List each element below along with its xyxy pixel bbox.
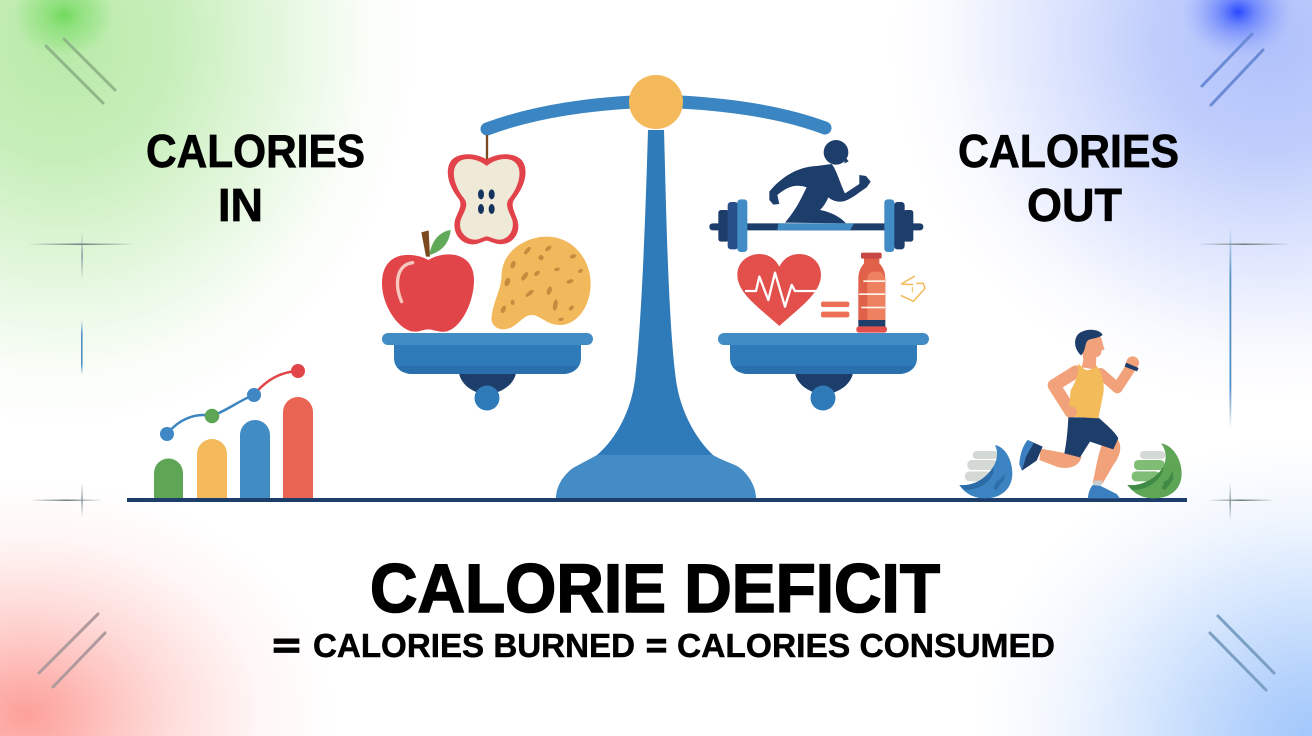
- icon: barbell: [709, 199, 923, 252]
- front leg: [1093, 438, 1120, 483]
- formula subtitle: [273, 627, 1055, 664]
- formula subtitle: =: [273, 627, 300, 664]
- front arm: [1101, 369, 1130, 388]
- icon: equals sign: [821, 302, 849, 317]
- icon: running silhouette: [769, 140, 871, 223]
- back arm: [1054, 372, 1076, 412]
- icon: cookie: [492, 237, 591, 329]
- exercise items on right pan: [709, 140, 925, 333]
- bars: [154, 397, 313, 498]
- sock: [1093, 481, 1103, 487]
- wristband: [1125, 363, 1139, 371]
- trend points: [160, 364, 305, 441]
- bar and line chart: [154, 364, 313, 498]
- icon: drink bottle: [856, 253, 887, 333]
- front shoe: [1088, 485, 1120, 498]
- heading: calories out: [958, 125, 1179, 231]
- neck and head: [1082, 348, 1098, 370]
- icon: heart with pulse: [737, 254, 821, 326]
- heading: calories out: OUT: [1027, 179, 1122, 231]
- back leg: [1039, 449, 1082, 468]
- tank top: [1068, 363, 1104, 418]
- heading: calories in: IN: [218, 179, 263, 231]
- icon: apple slice: [448, 135, 526, 244]
- scale stand: [556, 130, 756, 498]
- hand on hip: [1066, 406, 1077, 417]
- jogging figure with bowls: [959, 330, 1182, 498]
- hand: [1126, 356, 1139, 369]
- left pan: [382, 333, 593, 410]
- sparkle crosses: [28, 228, 1290, 521]
- hair: [1075, 330, 1103, 355]
- balance scale: [382, 75, 929, 498]
- ground line: [127, 498, 1187, 502]
- icon: blue bowl: [959, 445, 1012, 498]
- formula subtitle: =: [646, 627, 667, 664]
- heading: calories out: CALORIES: [958, 125, 1179, 177]
- main title: CALORIE DEFICIT: [370, 550, 940, 627]
- icon: runner: [1019, 330, 1139, 498]
- back shoe: [1019, 440, 1043, 471]
- icon: small sparkle doodle: [901, 276, 925, 301]
- icon: green bowl: [1127, 443, 1182, 498]
- formula subtitle: CALORIES BURNED: [313, 627, 635, 664]
- shorts: [1064, 417, 1118, 457]
- scale pivot: [629, 75, 683, 129]
- formula subtitle: CALORIES CONSUMED: [677, 627, 1055, 664]
- trend line: [167, 371, 298, 434]
- heading: calories in: [146, 125, 365, 231]
- food items on left pan: [382, 135, 591, 332]
- right pan: [718, 333, 929, 410]
- heading: calories in: CALORIES: [146, 125, 365, 177]
- icon: red apple: [382, 230, 474, 332]
- scale beam: [487, 102, 825, 129]
